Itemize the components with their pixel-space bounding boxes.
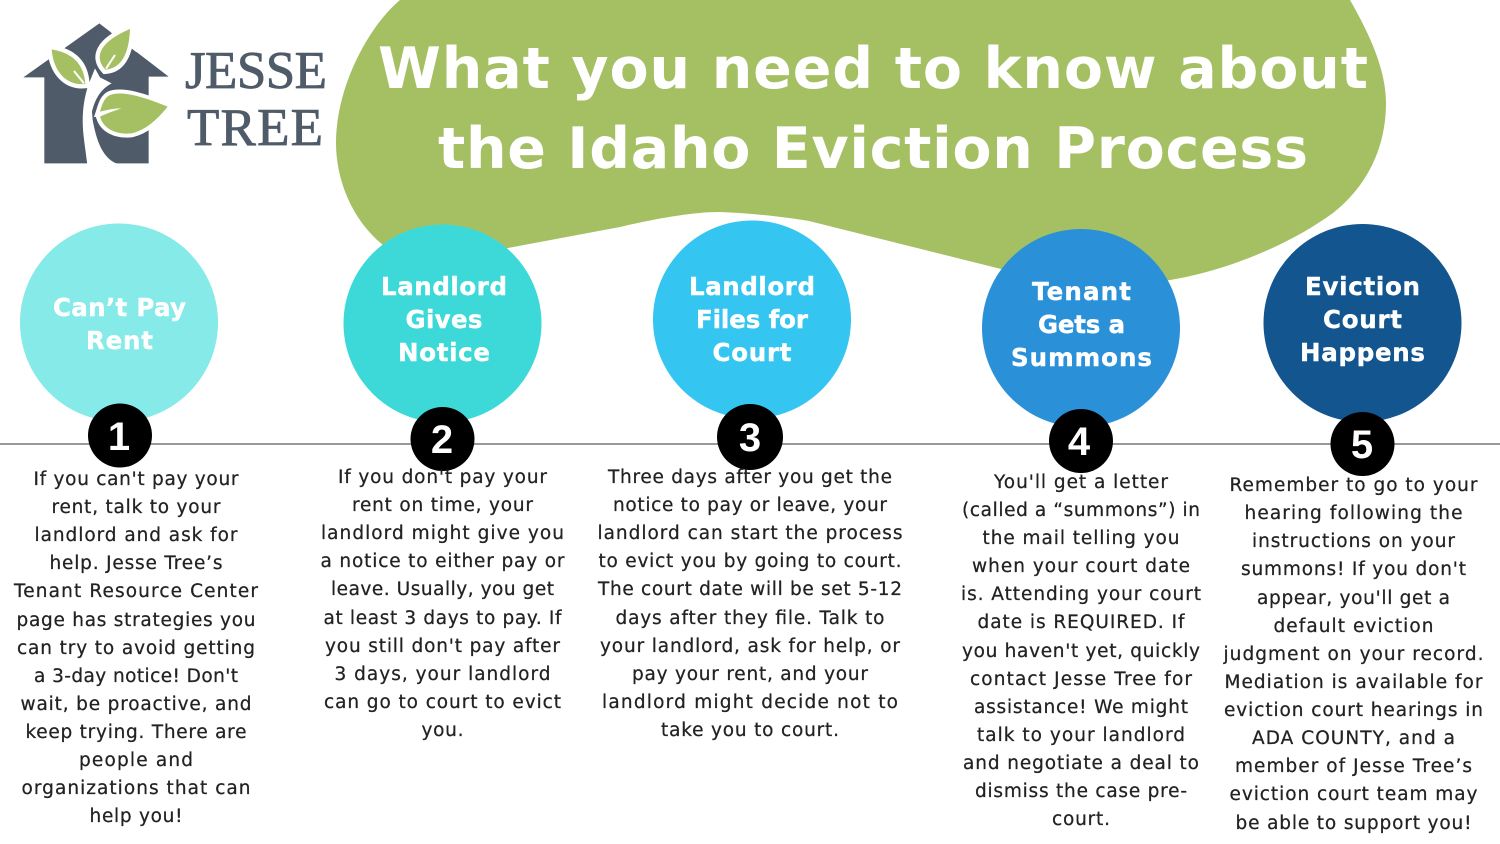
step 2 text: can go to court to evict xyxy=(324,692,561,713)
number badge 3: 3 xyxy=(739,416,761,460)
step 4 text: and negotiate a deal to xyxy=(963,753,1199,774)
step 4 text: You'll get a letter xyxy=(993,472,1168,493)
step 1 text: a 3-day notice! Don't xyxy=(34,666,238,687)
step 2 text: landlord might give you xyxy=(321,523,564,544)
logo wordmark: JESSE xyxy=(185,42,327,100)
icon: house with tree xyxy=(23,23,169,165)
step 1 text: can try to avoid getting xyxy=(17,638,255,659)
step 5 text: eviction court team may xyxy=(1230,784,1478,805)
step 1 text: people and xyxy=(79,750,193,771)
step 5 text: eviction court hearings in xyxy=(1224,700,1483,721)
title: What you need to know about xyxy=(378,36,1368,102)
step 1 text: wait, be proactive, and xyxy=(20,694,252,715)
step 5 text: instructions on your xyxy=(1252,531,1455,552)
step 3 circle: Court xyxy=(712,338,792,367)
step 4 text: court. xyxy=(1052,809,1110,830)
logo wordmark xyxy=(185,42,327,157)
step 3 text: notice to pay or leave, your xyxy=(613,495,887,516)
step 2 text: If you don't pay your xyxy=(338,467,547,488)
step 1 text: help. Jesse Tree’s xyxy=(50,553,222,574)
step 3 text: Three days after you get the xyxy=(607,467,892,488)
step 4 text: dismiss the case pre- xyxy=(975,781,1187,802)
step 1 text: landlord and ask for xyxy=(34,525,238,546)
number badge 3 xyxy=(717,404,783,470)
step 3 circle xyxy=(653,220,851,418)
step 4 circle: Gets a xyxy=(1038,310,1125,339)
step 1 text: help you! xyxy=(90,806,182,827)
step 2 text: leave. Usually, you get xyxy=(331,579,554,600)
step 1 text: keep trying. There are xyxy=(26,722,246,743)
step 5 text: judgment on your record. xyxy=(1222,644,1484,665)
step 4 text: talk to your landlord xyxy=(977,725,1185,746)
title: the Idaho Eviction Process xyxy=(438,116,1308,182)
step 1 text xyxy=(13,469,258,827)
step 3 text: landlord might decide not to xyxy=(602,692,898,713)
step 1 text: Tenant Resource Center xyxy=(13,581,258,602)
step 5 text: summons! If you don't xyxy=(1241,559,1466,580)
step 5 circle: Court xyxy=(1323,305,1402,334)
step 1 circle xyxy=(20,224,218,422)
step 3 text: landlord can start the process xyxy=(598,523,902,544)
step 1 text: If you can't pay your xyxy=(34,469,239,490)
step 3 text: pay your rent, and your xyxy=(632,664,868,685)
logo wordmark: TREE xyxy=(187,99,323,157)
number badge 1: 1 xyxy=(108,415,130,459)
number badge 4: 4 xyxy=(1068,420,1091,464)
step 4 text: when your court date xyxy=(972,556,1190,577)
step 2 circle: Landlord xyxy=(381,272,507,301)
step 1 circle: Rent xyxy=(86,326,153,355)
step 4 text xyxy=(961,472,1201,830)
step 5 circle: Happens xyxy=(1300,338,1425,367)
step 5 text: appear, you'll get a xyxy=(1257,588,1450,609)
step 2 text: a notice to either pay or xyxy=(320,551,565,572)
step 2 text: rent on time, your xyxy=(352,495,533,516)
step 2 text xyxy=(320,467,565,741)
step 3 text: to evict you by going to court. xyxy=(598,551,902,572)
step 4 circle: Summons xyxy=(1011,343,1152,372)
step 2 circle: Notice xyxy=(398,338,490,367)
timeline line xyxy=(0,443,1500,445)
step 5 text: ADA COUNTY, and a xyxy=(1252,728,1455,749)
step 3 text: days after they file. Talk to xyxy=(616,608,884,629)
step 2 text: you still don't pay after xyxy=(325,636,560,657)
number badge 1 xyxy=(88,404,152,468)
step 4 circle: Tenant xyxy=(1032,277,1131,306)
number badge 4 xyxy=(1049,409,1113,473)
step 2 circle: Gives xyxy=(406,305,482,334)
step 3 text: your landlord, ask for help, or xyxy=(600,636,900,657)
step 3 circle: Landlord xyxy=(689,272,815,301)
step 2 text: at least 3 days to pay. If xyxy=(324,608,562,629)
step 3 text xyxy=(597,467,902,741)
step 3 circle: Files for xyxy=(696,305,809,334)
step 1 text: page has strategies you xyxy=(16,610,256,631)
step 4 text: (called a “summons”) in xyxy=(962,500,1200,521)
step 3 text: take you to court. xyxy=(661,720,839,741)
number badge 2 xyxy=(410,407,474,471)
step 5 text: Remember to go to your xyxy=(1230,475,1478,496)
logo: Jesse Tree xyxy=(23,23,327,165)
step 4 text: is. Attending your court xyxy=(961,584,1201,605)
step 5 text: be able to support you! xyxy=(1236,813,1472,834)
step 5 text: member of Jesse Tree’s xyxy=(1235,756,1472,777)
step 2 text: you. xyxy=(422,720,464,741)
step 3 text: The court date will be set 5-12 xyxy=(597,579,902,600)
step 5 text xyxy=(1222,475,1484,834)
number badge 2: 2 xyxy=(431,418,453,462)
step 1 circle: Can’t Pay xyxy=(53,293,186,322)
step 4 text: contact Jesse Tree for xyxy=(970,669,1192,690)
title xyxy=(378,36,1368,182)
step 5 text: Mediation is available for xyxy=(1224,672,1483,693)
step 4 text: you haven't yet, quickly xyxy=(962,641,1200,662)
step 5 text: default eviction xyxy=(1274,616,1434,637)
step 4 text: date is REQUIRED. If xyxy=(978,612,1185,633)
number badge 5 xyxy=(1330,412,1394,476)
step 5 circle xyxy=(1264,224,1462,422)
title banner blob xyxy=(336,0,1386,284)
step 4 text: the mail telling you xyxy=(982,528,1180,549)
step 5 text: hearing following the xyxy=(1244,503,1462,524)
step 2 circle xyxy=(344,224,542,422)
step 1 text: rent, talk to your xyxy=(52,497,221,518)
step 4 text: assistance! We might xyxy=(974,697,1188,718)
number badge 5: 5 xyxy=(1351,423,1373,467)
step 2 text: 3 days, your landlord xyxy=(334,664,550,685)
step 1 text: organizations that can xyxy=(22,778,250,799)
step 4 circle xyxy=(982,229,1180,427)
step 5 circle: Eviction xyxy=(1305,272,1420,301)
